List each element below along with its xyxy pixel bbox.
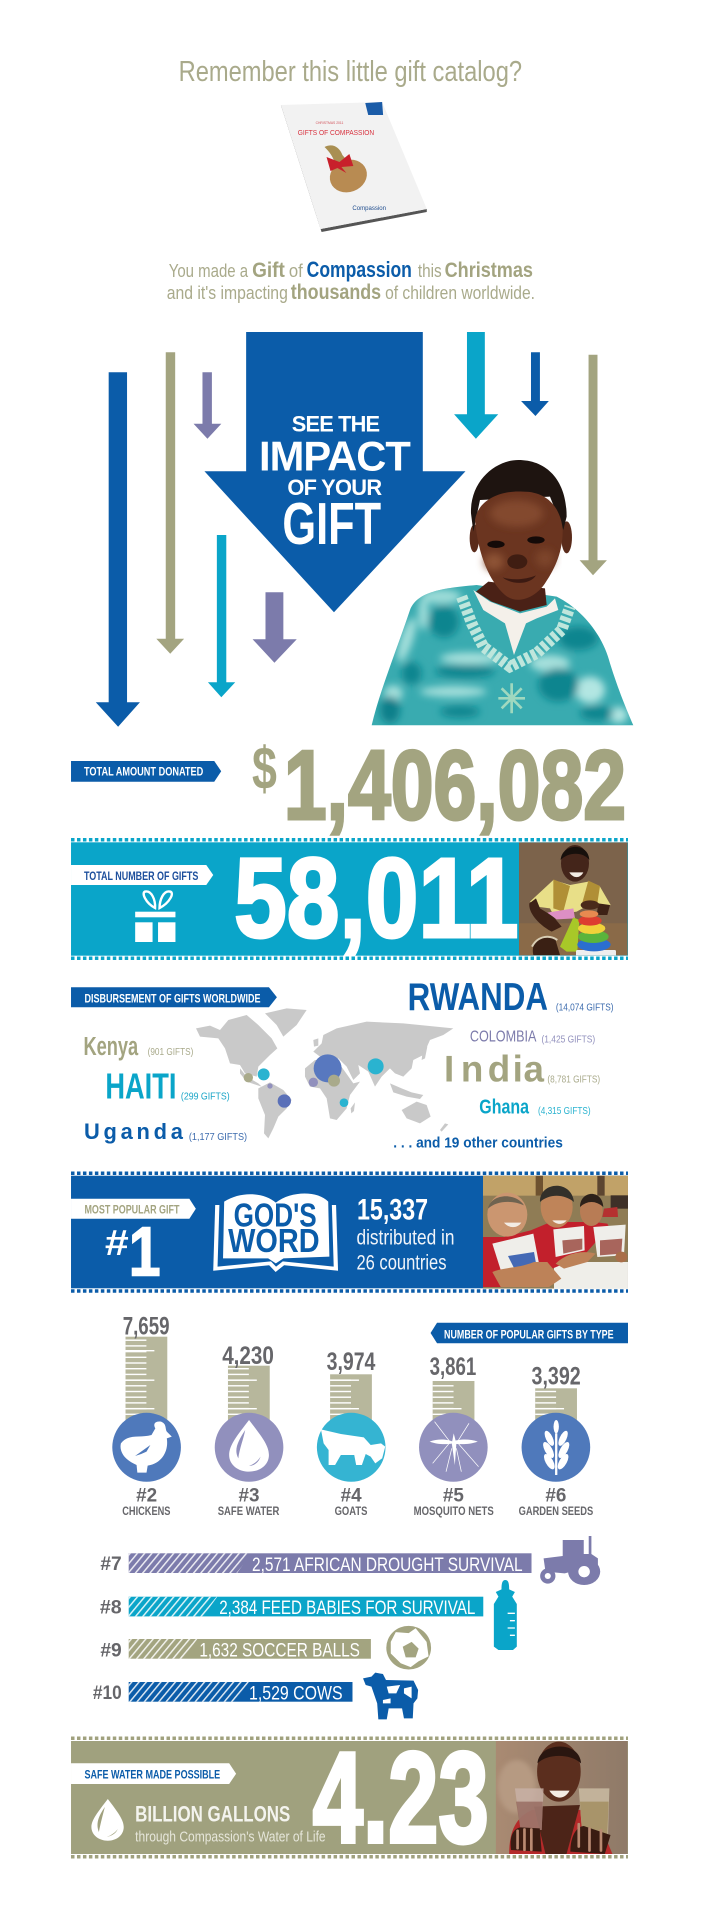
tag: most popular gift: MOST POPULAR GIFT	[84, 1204, 179, 1216]
column chart: garden seeds: #6	[545, 1486, 566, 1507]
tag: safe water made possible: SAFE WATER MADE POSSIBLE	[84, 1769, 220, 1781]
rank: #1: #	[105, 1223, 129, 1263]
bar: #9 soccer balls: 1,632 SOCCER BALLS	[199, 1639, 360, 1662]
rank: #1: 1	[129, 1213, 161, 1291]
arrow: long khaki	[156, 352, 184, 654]
column chart: garden seeds	[519, 1362, 593, 1518]
label: Uganda: (1,177 GIFTS)	[189, 1132, 247, 1143]
title: of your: OF YOUR	[287, 475, 382, 500]
column chart: safe water: SAFE WATER	[218, 1506, 280, 1518]
label: Rwanda: RWANDA	[408, 976, 548, 1019]
column chart: goats: GOATS	[335, 1506, 368, 1518]
column chart: chickens	[112, 1312, 181, 1518]
bar: #8 feed babies for survival: 2,384 FEED BABIES FOR SURVIVAL	[219, 1597, 475, 1619]
icon: God's Word open book: GOD'S	[234, 1197, 317, 1234]
label: Colombia	[470, 1029, 595, 1046]
intro text line 1: of	[289, 261, 303, 281]
image: gift catalog booklet	[281, 102, 427, 232]
label: Uganda	[84, 1119, 247, 1144]
label: Colombia: COLOMBIA	[470, 1029, 537, 1046]
section: header and arrows	[96, 56, 607, 727]
stat: 15,337 distributed	[356, 1193, 454, 1274]
photo: child holding water glasses	[496, 1741, 628, 1854]
bar: #10 cows: #10	[93, 1683, 122, 1704]
number: 4.23: 4.23	[313, 1727, 489, 1870]
bar: #10 cows: 1,529 COWS	[249, 1682, 343, 1705]
stat: 15,337 distributed: 26 countries	[356, 1251, 446, 1274]
intro text line 2: thousands	[291, 281, 381, 304]
label: India	[444, 1049, 600, 1090]
panel: most popular gift	[71, 1173, 628, 1291]
image: gift catalog booklet: CHRISTMAS 2011	[316, 121, 343, 125]
intro text line 2: of children worldwide.	[385, 283, 535, 303]
icon: God's Word open book	[215, 1194, 336, 1269]
photo: child with stacking toy	[519, 842, 628, 957]
tag: total number of gifts: TOTAL NUMBER OF GIFTS	[84, 871, 199, 883]
tag: disbursement of gifts worldwide: DISBURSEMENT OF GIFTS WORLDWIDE	[84, 993, 261, 1005]
arrow: wide purple	[253, 592, 297, 663]
label: Colombia: (1,425 GIFTS)	[541, 1034, 595, 1045]
panel: safe water made possible	[71, 1736, 628, 1858]
column chart: goats: 3,974	[327, 1348, 375, 1376]
stat: 15,337 distributed: distributed in	[356, 1226, 454, 1249]
icon: baby bottle	[494, 1580, 517, 1650]
icon: water drop	[91, 1799, 124, 1841]
title: see the: SEE THE	[292, 412, 380, 437]
intro text line 2: and it's impacting	[167, 283, 288, 303]
main arrow with title	[204, 332, 465, 612]
bar: #8 feed babies for survival	[100, 1597, 483, 1619]
column chart: garden seeds: GARDEN SEEDS	[519, 1506, 593, 1518]
column chart: mosquito nets: 3,861	[430, 1353, 476, 1381]
photo: children holding bibles	[483, 1176, 628, 1289]
tag: number of popular gifts by type	[431, 1323, 628, 1343]
image: gift catalog booklet: GIFTS OF COMPASSION	[298, 128, 374, 137]
label: Ghana: (4,315 GIFTS)	[538, 1106, 591, 1117]
icon: water drop	[229, 1420, 269, 1472]
bar: #9 soccer balls: #9	[100, 1641, 122, 1662]
column chart: mosquito nets: #5	[443, 1486, 464, 1507]
column chart: mosquito nets	[414, 1353, 494, 1518]
column chart: safe water: 4,230	[222, 1342, 274, 1370]
bar: #8 feed babies for survival: #8	[100, 1597, 122, 1618]
intro text line 1	[169, 257, 533, 282]
column chart: safe water	[215, 1342, 283, 1518]
arrow: small purple	[194, 372, 221, 439]
icon: tractor	[540, 1536, 600, 1585]
label: Kenya: Kenya	[83, 1033, 139, 1061]
bar: #10 cows	[93, 1682, 352, 1705]
tag: disbursement of gifts worldwide	[71, 987, 277, 1007]
label: other countries: . . . and 19 other countries	[393, 1136, 563, 1152]
stat: 15,337 distributed: 15,337	[357, 1193, 428, 1226]
icon: chicken	[121, 1421, 172, 1473]
label: Uganda: Uganda	[84, 1119, 184, 1144]
arrow: thin teal	[208, 535, 235, 697]
bar: #7 African drought survival: #7	[100, 1554, 122, 1575]
icon: cow	[363, 1673, 418, 1719]
tag: total number of gifts	[71, 865, 213, 885]
intro text line 1: Compassion	[307, 257, 412, 282]
column chart: goats	[317, 1348, 386, 1518]
number: 58,011: 58,011	[234, 835, 519, 961]
tag: number of popular gifts by type: NUMBER OF POPULAR GIFTS BY TYPE	[444, 1329, 614, 1341]
column chart: mosquito nets: MOSQUITO NETS	[414, 1506, 494, 1518]
label: Kenya: (901 GIFTS)	[148, 1047, 193, 1058]
text: through Compassion's Water of Life: through Compassion's Water of Life	[135, 1829, 326, 1846]
column chart: safe water: #3	[239, 1486, 260, 1507]
icon: God's Word open book: WORD	[228, 1222, 320, 1259]
label: Haiti: HAITI	[105, 1066, 176, 1106]
number: total amount: $	[252, 735, 277, 802]
bar: #7 African drought survival: 2,571 AFRICAN DROUGHT SURVIVAL	[252, 1554, 523, 1576]
icon: gift box	[135, 891, 175, 942]
panel: total number of gifts	[71, 835, 628, 961]
label: India: (8,781 GIFTS)	[547, 1074, 600, 1085]
rank: #1	[105, 1213, 161, 1291]
arrow: wide teal	[454, 332, 498, 439]
label: Ghana	[479, 1096, 591, 1118]
chart: world map with bubbles	[196, 1008, 453, 1138]
icon: soccer ball	[386, 1626, 431, 1670]
column chart: chickens: 7,659	[123, 1312, 169, 1340]
image: gift catalog booklet: Compassion	[352, 206, 386, 212]
tag: safe water made possible	[71, 1763, 236, 1784]
label: Rwanda: (14,074 GIFTS)	[556, 1002, 614, 1014]
intro text line 1: Christmas	[445, 259, 533, 282]
column chart: chickens: #2	[136, 1486, 157, 1507]
tag: total amount donated	[71, 761, 221, 782]
label: Haiti: (299 GIFTS)	[181, 1091, 230, 1102]
icon: mosquito	[430, 1422, 479, 1472]
bar: #9 soccer balls	[100, 1639, 371, 1662]
title: impact: IMPACT	[259, 433, 411, 480]
tag: total amount donated: TOTAL AMOUNT DONATED	[84, 767, 203, 779]
arrow: long khaki right	[580, 355, 607, 575]
bar: #7 African drought survival	[100, 1553, 532, 1576]
intro text line 1: Gift	[252, 259, 285, 282]
icon: goat	[321, 1429, 385, 1465]
column chart: chickens: CHICKENS	[122, 1506, 171, 1518]
heading: remember this little gift catalog: Remember this little gift catalog?	[179, 56, 522, 88]
photo: smiling child in teal shirt	[372, 460, 633, 725]
label: Ghana: Ghana	[479, 1096, 530, 1118]
intro text line 2	[167, 281, 535, 304]
intro text line 1: this	[418, 261, 442, 281]
text: billion gallons: BILLION GALLONS	[135, 1802, 290, 1827]
icon: wheat	[541, 1420, 572, 1475]
column chart: garden seeds: 3,392	[532, 1362, 581, 1390]
section: statistics	[71, 731, 628, 1870]
arrow: long blue	[96, 372, 140, 727]
label: India: India	[444, 1049, 545, 1090]
tag: most popular gift	[71, 1199, 196, 1219]
column chart: goats: #4	[341, 1486, 362, 1507]
title: gift: GIFT	[282, 492, 381, 557]
intro text line 1: You made a	[169, 261, 248, 281]
arrow: small blue	[521, 352, 549, 416]
